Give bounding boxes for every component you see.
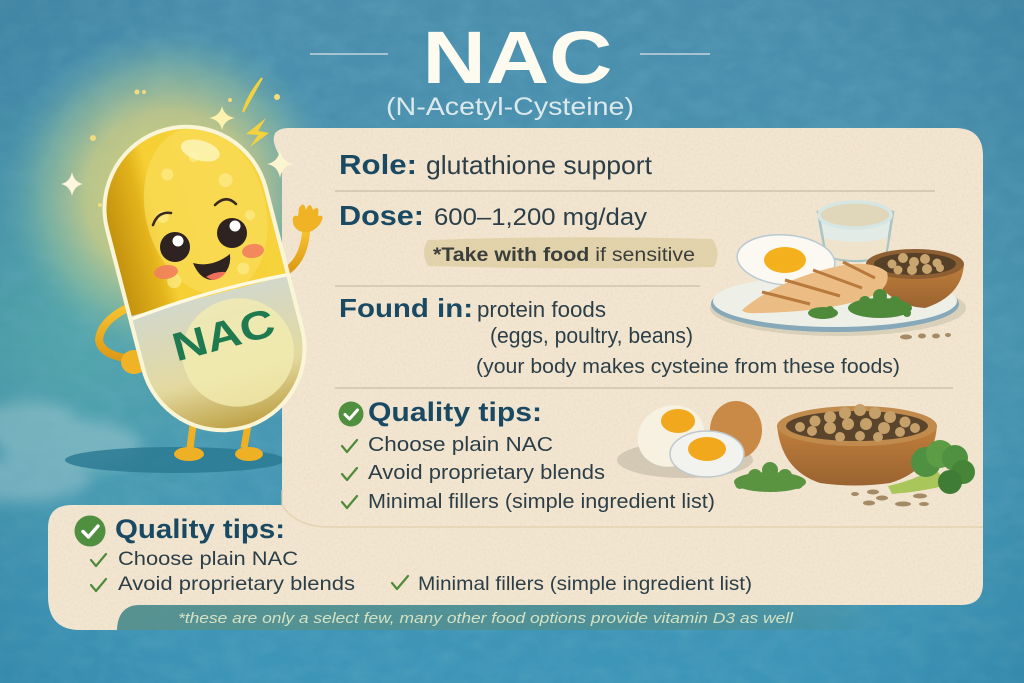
food plate illustration — [710, 202, 966, 340]
dose row: Dose: — [339, 200, 424, 231]
grilled chicken — [742, 262, 888, 313]
highlight note — [424, 237, 718, 268]
panel seam — [282, 490, 983, 527]
seeds — [900, 333, 951, 340]
seam — [131, 273, 287, 319]
dose row — [339, 200, 647, 231]
found in row: protein foods — [477, 297, 606, 322]
yellow top half — [106, 128, 286, 316]
halved egg — [735, 231, 837, 289]
tongue — [206, 272, 226, 280]
legs and feet — [174, 425, 263, 461]
eggs and bowl illustration — [617, 394, 975, 506]
cheeks — [153, 243, 265, 281]
sparkles and lightning — [61, 78, 293, 207]
found in row — [339, 293, 900, 378]
quality tips upper: Minimal fillers (simple ingredient list) — [368, 491, 715, 513]
eyebrows — [153, 199, 236, 225]
panel texture — [48, 128, 983, 630]
title: NAC — [422, 16, 612, 99]
capsule outline — [84, 106, 325, 451]
wooden bowl with beans — [777, 404, 937, 486]
bubbles — [157, 156, 255, 288]
role row: Role: — [339, 149, 417, 180]
title rule left — [310, 53, 388, 55]
broccoli — [888, 440, 975, 494]
parsley — [808, 289, 912, 319]
ground shadow — [65, 447, 285, 473]
quality tips lower: Quality tips: — [115, 514, 285, 544]
whole egg — [710, 401, 762, 459]
capsule label: NAC — [168, 301, 280, 370]
quality tips upper — [338, 397, 715, 513]
quality tips lower: Choose plain NAC — [118, 548, 298, 570]
parsley — [734, 462, 806, 492]
dose row: 600–1,200 mg/day — [434, 204, 647, 231]
top highlight — [180, 140, 220, 162]
role row: glutathione support — [426, 150, 653, 180]
highlight note: *Take with food if sensitive — [433, 244, 695, 266]
glass of milk — [818, 202, 893, 261]
subtitle: (N-Acetyl-Cysteine) — [386, 93, 634, 121]
shadow — [617, 442, 753, 478]
panel shape — [48, 128, 983, 630]
plate — [710, 275, 966, 336]
footnote: *these are only a select few, many other food options provide vitamin D3 as well — [178, 610, 794, 627]
mouth — [193, 254, 230, 280]
quality tips lower: Avoid proprietary blends — [118, 573, 355, 595]
capsule mascot — [102, 124, 306, 432]
yellow glow behind capsule — [0, 25, 340, 365]
clear bottom half — [132, 276, 302, 428]
found in row: Found in: — [339, 293, 473, 323]
icon: check badge — [338, 402, 364, 426]
role row — [339, 149, 653, 180]
footnote band — [117, 605, 900, 630]
found in row: (eggs, poultry, beans) — [490, 323, 693, 348]
quality tips lower — [74, 514, 752, 595]
clouds — [0, 401, 140, 502]
seeds — [851, 490, 929, 506]
icon: check badge lower — [74, 516, 106, 546]
quality tips upper: Avoid proprietary blends — [368, 462, 605, 484]
quality tips upper: Quality tips: — [368, 397, 542, 427]
egg half back — [628, 394, 714, 478]
title rule right — [640, 53, 710, 55]
face — [153, 199, 265, 281]
eyes — [160, 218, 247, 262]
right arm waving — [288, 204, 323, 270]
quality tips upper: Choose plain NAC — [368, 434, 553, 456]
bottom inner fill — [182, 298, 294, 407]
egg half front — [670, 431, 744, 477]
bean bowl — [866, 249, 964, 308]
left arm — [99, 308, 147, 374]
lighter inner fill — [144, 128, 268, 294]
found in row: (your body makes cysteine from these foods) — [476, 355, 900, 378]
info panel — [48, 128, 983, 630]
quality tips lower: Minimal fillers (simple ingredient list) — [418, 573, 752, 595]
